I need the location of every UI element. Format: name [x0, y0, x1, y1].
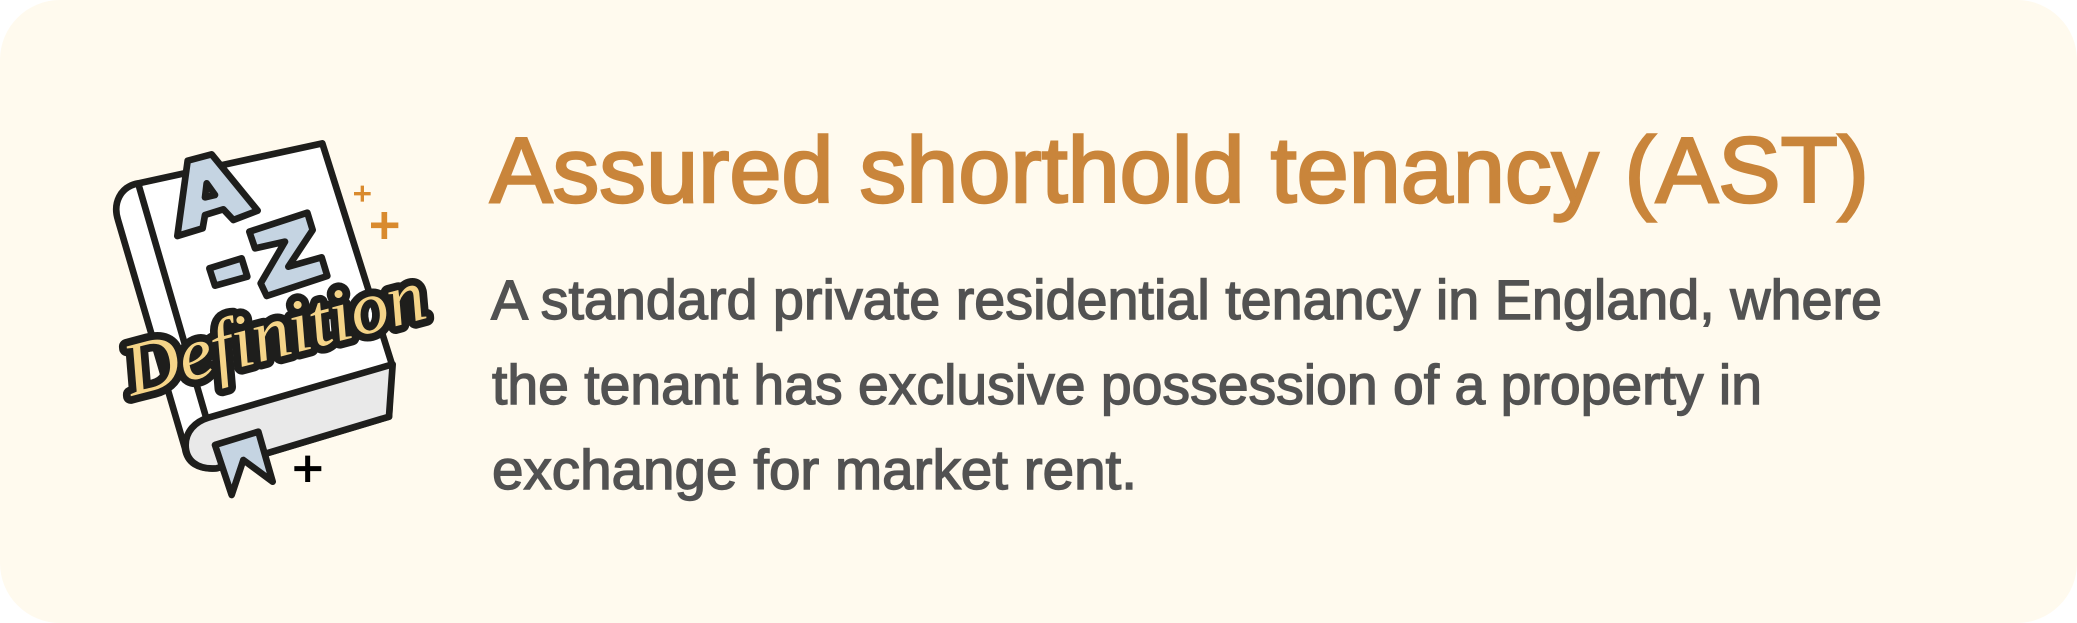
book spine line	[138, 184, 206, 416]
definition script label: Definition	[114, 253, 434, 413]
letter A	[177, 154, 258, 236]
book cover	[116, 143, 392, 468]
icon: definition book	[114, 143, 434, 495]
body line 2: the tenant has exclusive possession of a property in	[492, 353, 1762, 416]
small orange sparkle	[354, 186, 371, 202]
body line 3: exchange for market rent.	[492, 438, 1137, 501]
definition text	[491, 268, 1882, 501]
large orange sparkle	[371, 212, 398, 239]
letter Z	[249, 213, 327, 296]
title: Assured shorthold tenancy (AST)	[490, 118, 1869, 222]
dash	[209, 258, 247, 286]
black sparkle	[294, 456, 321, 482]
body line 1: A standard private residential tenancy in England, where	[491, 268, 1882, 331]
bookmark	[215, 432, 273, 495]
page block	[186, 364, 393, 469]
